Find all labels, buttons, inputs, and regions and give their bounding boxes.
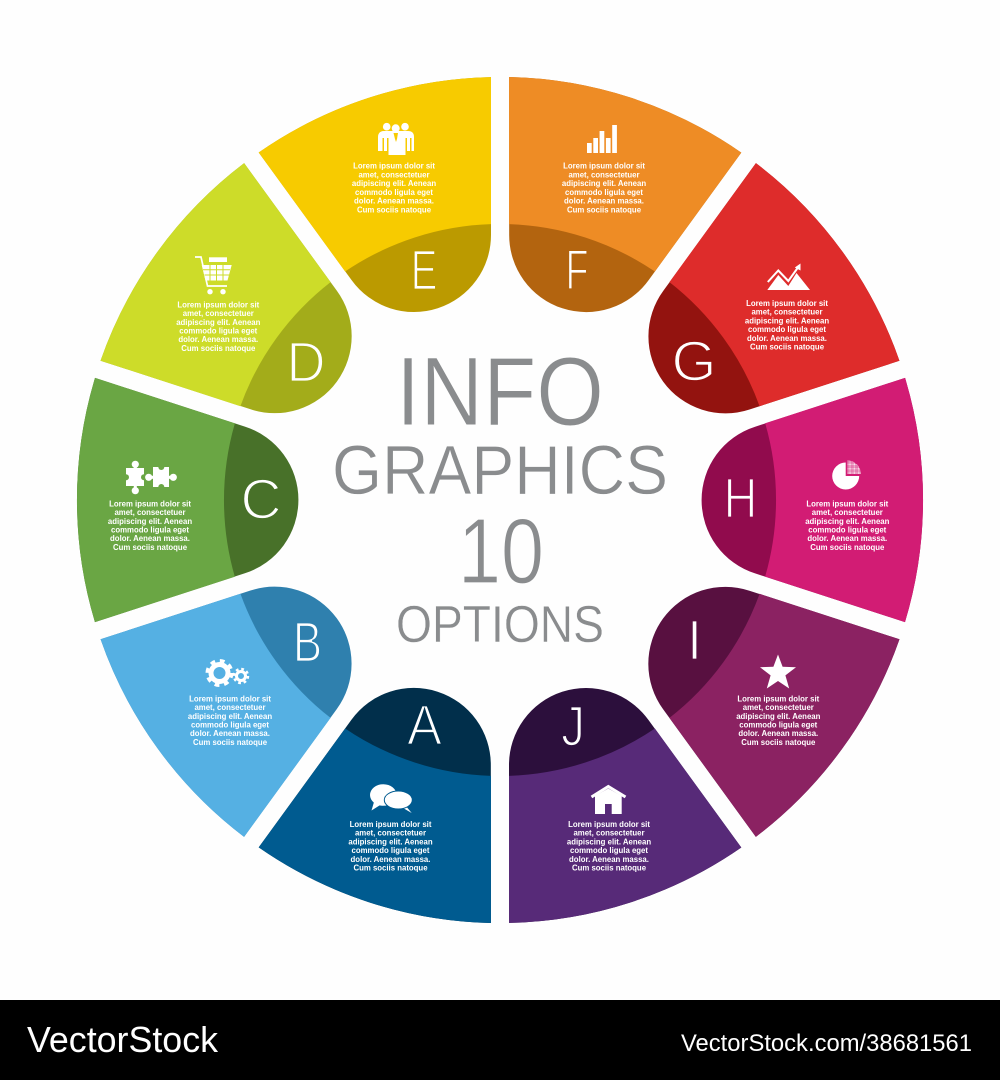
segment shape G	[604, 140, 899, 433]
text A: adipiscing elit. Aenean	[348, 837, 433, 846]
text I: adipiscing elit. Aenean	[736, 712, 821, 721]
icon: house	[592, 786, 626, 814]
letter I: I	[687, 608, 702, 672]
text I: Lorem ipsum dolor sit	[737, 694, 820, 703]
text G: commodo ligula eget	[748, 325, 826, 334]
segment shape F	[415, 16, 741, 343]
panel: E	[259, 77, 491, 312]
text B: commodo ligula eget	[191, 720, 269, 729]
text A: dolor. Aenean massa.	[351, 855, 430, 864]
text D: amet, consectetuer	[183, 309, 254, 318]
text J: adipiscing elit. Aenean	[567, 837, 651, 846]
segment shape C	[23, 378, 318, 671]
panel: J	[509, 688, 741, 923]
icon: star	[760, 654, 796, 688]
text B: Lorem ipsum dolor sit	[189, 694, 271, 703]
text G: amet, consectetuer	[751, 308, 823, 317]
text A: Cum sociis natoque	[353, 864, 428, 873]
text E: amet, consectetuer	[358, 170, 430, 179]
text D: dolor. Aenean massa.	[178, 335, 258, 344]
text F: dolor. Aenean massa.	[564, 197, 644, 206]
segment shape A	[259, 657, 585, 984]
heading INFO: INFO	[396, 337, 604, 446]
text F: adipiscing elit. Aenean	[562, 179, 646, 188]
icon: speech bubbles	[370, 784, 412, 813]
panel: A	[259, 657, 585, 984]
icon: shopping cart	[195, 257, 232, 294]
text J: dolor. Aenean massa.	[569, 855, 649, 864]
segment shape E	[259, 77, 491, 312]
panel: D	[56, 163, 382, 490]
text B: Cum sociis natoque	[193, 738, 268, 747]
text C: amet, consectetuer	[114, 508, 186, 517]
text J: Lorem ipsum dolor sit	[568, 820, 650, 829]
text G: dolor. Aenean massa.	[747, 334, 827, 343]
text G: adipiscing elit. Aenean	[745, 316, 829, 325]
panel: C	[23, 378, 318, 671]
text I: dolor. Aenean massa.	[738, 729, 818, 738]
icon: puzzle pieces	[123, 461, 177, 494]
panel: I	[618, 510, 944, 837]
letter J: J	[561, 694, 585, 758]
panel: B	[101, 567, 396, 860]
text C: Lorem ipsum dolor sit	[109, 499, 191, 508]
text E: adipiscing elit. Aenean	[352, 179, 436, 188]
icon: people	[378, 123, 414, 155]
text B: amet, consectetuer	[194, 703, 266, 712]
text H: amet, consectetuer	[812, 508, 883, 517]
text E: dolor. Aenean massa.	[354, 197, 434, 206]
title: center	[332, 337, 668, 654]
text H: Lorem ipsum dolor sit	[806, 499, 889, 508]
letter H: H	[724, 466, 757, 530]
text A: Lorem ipsum dolor sit	[350, 820, 432, 829]
text D: Lorem ipsum dolor sit	[177, 300, 260, 309]
text E: commodo ligula eget	[355, 188, 433, 197]
heading GRAPHICS: GRAPHICS	[332, 431, 668, 509]
panel: H	[682, 329, 977, 622]
text J: amet, consectetuer	[573, 829, 645, 838]
text E: Lorem ipsum dolor sit	[353, 162, 435, 171]
text D: adipiscing elit. Aenean	[176, 318, 261, 327]
segment shape B	[101, 567, 396, 860]
letter C: C	[240, 468, 282, 532]
text B: dolor. Aenean massa.	[190, 729, 270, 738]
segment shape D	[56, 163, 382, 490]
text H: commodo ligula eget	[808, 525, 887, 534]
letter G: G	[672, 330, 716, 394]
text G: Lorem ipsum dolor sit	[746, 299, 828, 308]
text A: commodo ligula eget	[352, 846, 430, 855]
panel: G	[604, 140, 899, 433]
icon: gears	[208, 661, 248, 685]
text F: Lorem ipsum dolor sit	[563, 162, 645, 171]
icon: mountain trend	[767, 264, 810, 290]
footer bar	[0, 1000, 1000, 1080]
text F: amet, consectetuer	[568, 170, 640, 179]
heading OPTIONS: OPTIONS	[396, 596, 604, 654]
text G: Cum sociis natoque	[750, 343, 825, 352]
letter D: D	[286, 330, 326, 394]
footer brand: VectorStock	[27, 1019, 219, 1060]
panel: F	[415, 16, 741, 343]
text A: amet, consectetuer	[355, 829, 426, 838]
letter B: B	[293, 610, 322, 674]
text J: Cum sociis natoque	[572, 864, 647, 873]
text D: Cum sociis natoque	[181, 344, 256, 353]
segment shape H	[682, 329, 977, 622]
text H: Cum sociis natoque	[810, 543, 885, 552]
text C: Cum sociis natoque	[113, 543, 188, 552]
text I: commodo ligula eget	[739, 720, 818, 729]
icon: bar chart	[587, 125, 617, 153]
text H: dolor. Aenean massa.	[807, 534, 887, 543]
text D: commodo ligula eget	[179, 326, 258, 335]
icon: pie chart	[832, 460, 861, 490]
letter F: F	[566, 238, 588, 302]
heading 10: 10	[458, 499, 544, 603]
text I: amet, consectetuer	[743, 703, 814, 712]
text C: commodo ligula eget	[111, 525, 189, 534]
text E: Cum sociis natoque	[357, 205, 432, 214]
text F: commodo ligula eget	[565, 188, 643, 197]
segment shape I	[618, 510, 944, 837]
text C: adipiscing elit. Aenean	[108, 517, 192, 526]
text F: Cum sociis natoque	[567, 205, 642, 214]
text C: dolor. Aenean massa.	[110, 534, 190, 543]
text J: commodo ligula eget	[570, 846, 648, 855]
text B: adipiscing elit. Aenean	[188, 712, 272, 721]
text H: adipiscing elit. Aenean	[805, 517, 890, 526]
letter A: A	[407, 694, 442, 758]
letter E: E	[411, 238, 437, 302]
footer url: VectorStock.com/38681561	[681, 1030, 972, 1057]
text I: Cum sociis natoque	[741, 738, 816, 747]
segment shape J	[509, 688, 741, 923]
